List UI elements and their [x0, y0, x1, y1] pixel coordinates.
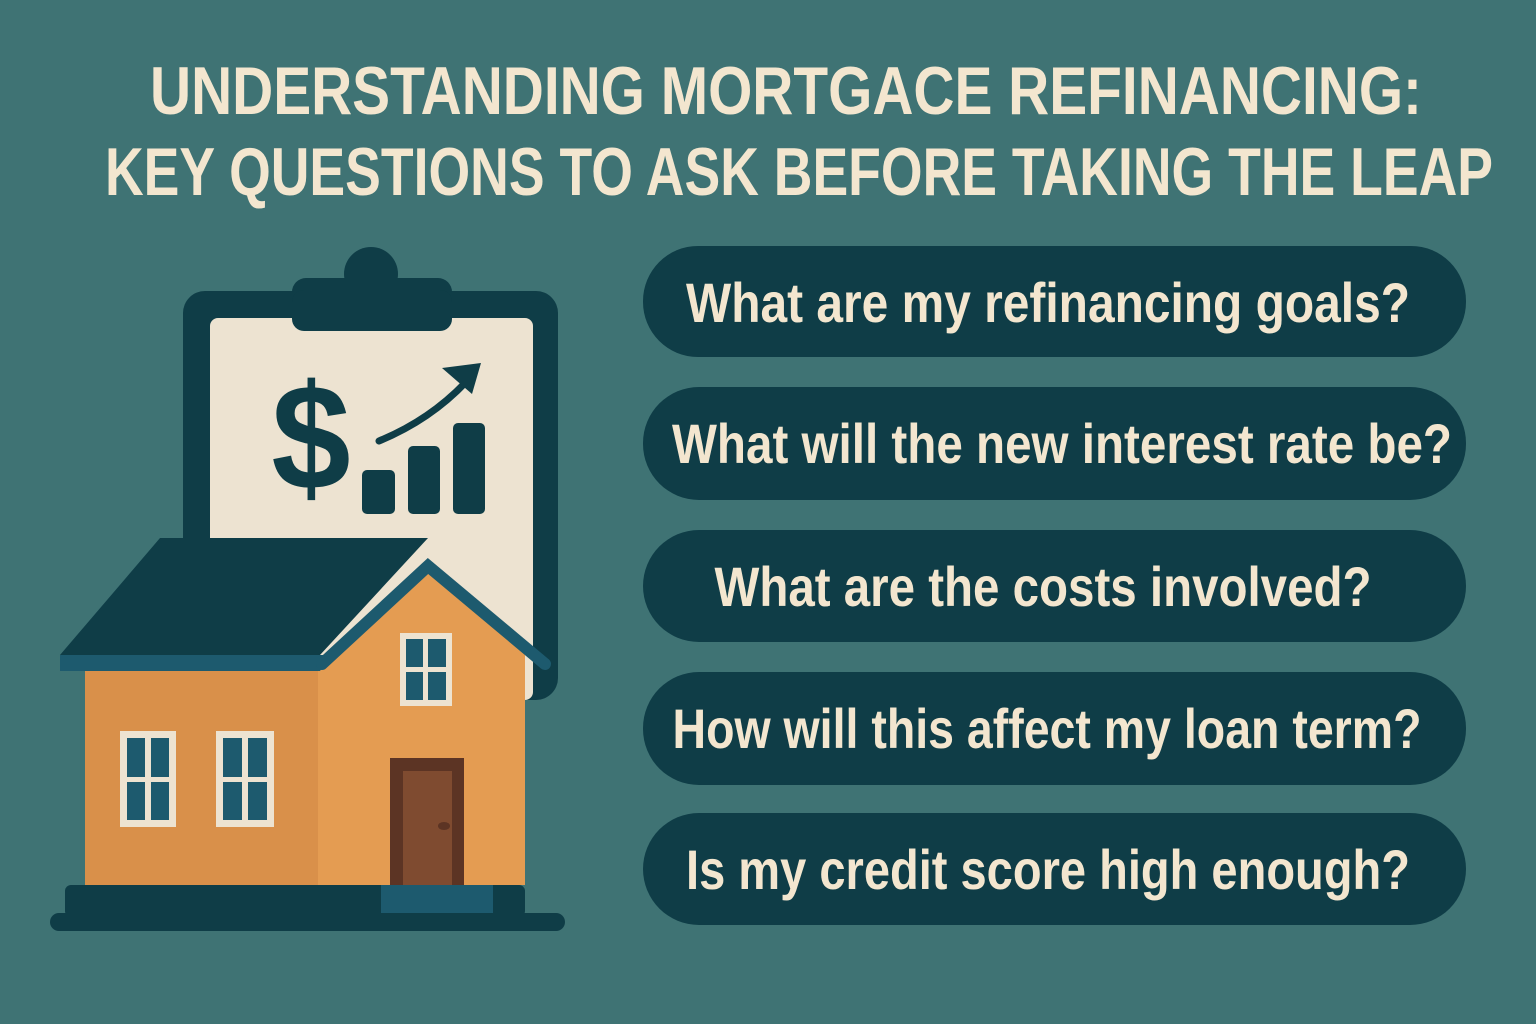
question 2 — [643, 387, 1466, 500]
icon: clipboard: $ — [271, 355, 351, 522]
question 3 — [643, 530, 1466, 642]
question 1: What are my refinancing goals? — [686, 271, 1410, 334]
question 5 — [643, 813, 1466, 925]
icon: clipboard — [183, 247, 558, 700]
title — [105, 53, 1493, 210]
question 1 — [643, 246, 1466, 357]
illustration: clipboard and house — [50, 247, 565, 931]
icon: house — [50, 538, 565, 931]
question 3: What are the costs involved? — [714, 555, 1372, 618]
question 4 — [643, 672, 1466, 785]
question 5: Is my credit score high enough? — [686, 838, 1410, 901]
